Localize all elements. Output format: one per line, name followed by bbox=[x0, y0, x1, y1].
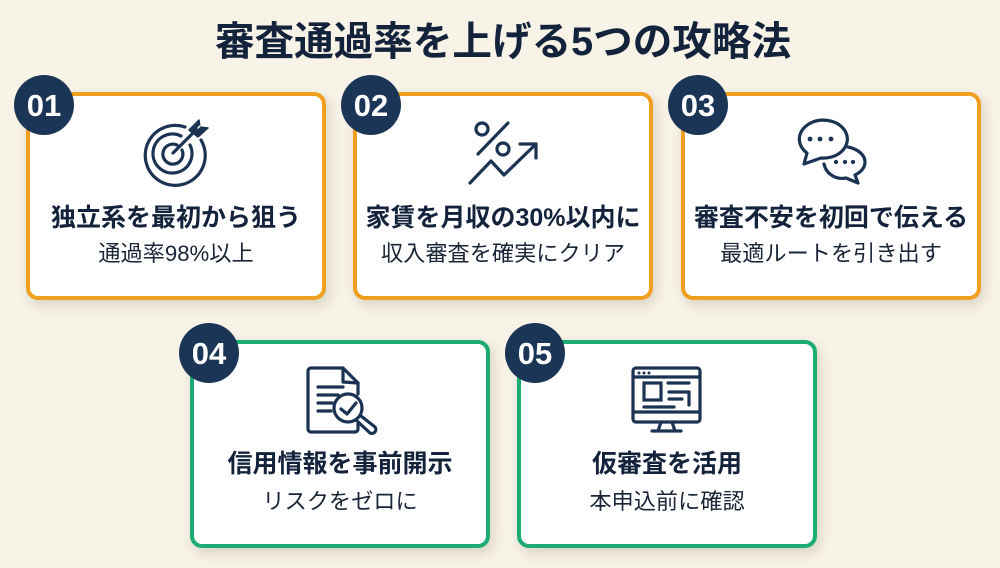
panel: card 03 bbox=[681, 92, 981, 300]
title: 審査通過率を上げる5つの攻略法 bbox=[215, 20, 791, 64]
badge: 01: 01 bbox=[27, 88, 61, 123]
badge: 05 bbox=[505, 323, 565, 383]
heading: 家賃を月収の30%以内に bbox=[365, 204, 641, 232]
icon: document with magnifier bbox=[306, 366, 378, 435]
icon: monitor with web page bbox=[631, 366, 702, 433]
badge: 01 bbox=[14, 75, 74, 135]
badge: 03 bbox=[668, 75, 728, 135]
text: detail: リスクをゼロに bbox=[262, 489, 418, 514]
badge: 02: 02 bbox=[354, 88, 388, 123]
text: detail: 収入審査を確実にクリア bbox=[381, 241, 625, 266]
badge: 03: 03 bbox=[681, 88, 715, 123]
text: detail: 本申込前に確認 bbox=[589, 489, 745, 514]
heading: 仮審査を活用 bbox=[592, 450, 742, 478]
icon: speech bubbles bbox=[798, 118, 867, 185]
icon: percent and rising arrow bbox=[468, 121, 538, 185]
panel: card 04 bbox=[190, 340, 490, 548]
badge: 04 bbox=[179, 323, 239, 383]
badge: 04: 04 bbox=[192, 336, 226, 371]
badge: 02 bbox=[341, 75, 401, 135]
icon: target bbox=[144, 119, 209, 187]
heading: 信用情報を事前開示 bbox=[227, 450, 452, 478]
panel: card 01 bbox=[26, 92, 326, 300]
panel: card 05 bbox=[517, 340, 817, 548]
panel: card 02 bbox=[353, 92, 653, 300]
heading: 独立系を最初から狙う bbox=[51, 204, 301, 232]
text: detail: 通過率98%以上 bbox=[98, 241, 254, 266]
heading: 審査不安を初回で伝える bbox=[694, 204, 968, 232]
badge: 05: 05 bbox=[518, 336, 552, 371]
text: detail: 最適ルートを引き出す bbox=[720, 241, 942, 266]
